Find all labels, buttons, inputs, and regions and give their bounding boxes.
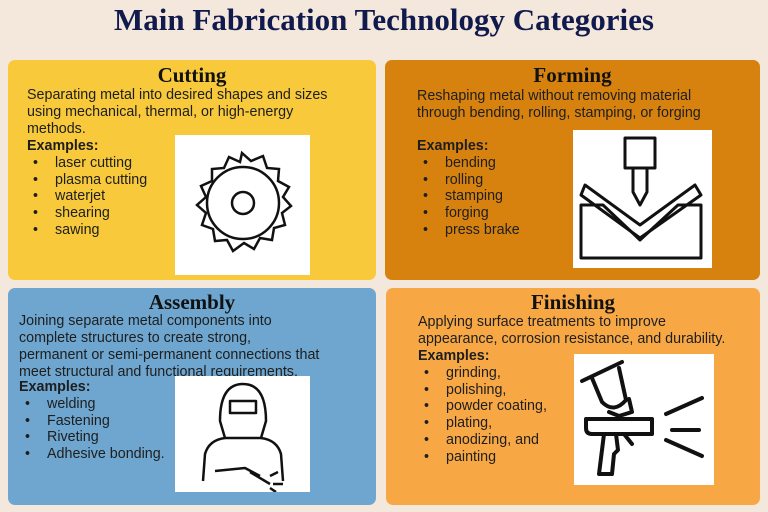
list: assembly examples: Examples:	[19, 379, 91, 395]
panel: finishing	[386, 288, 760, 505]
text: cutting description: methods.	[27, 121, 86, 137]
list: forming examples: stamping	[445, 188, 503, 204]
list: assembly examples	[19, 379, 165, 462]
list: forming examples: Examples:	[417, 138, 489, 154]
list: cutting examples: laser cutting	[55, 155, 132, 171]
text: finishing description	[418, 314, 725, 347]
panel: forming	[385, 60, 760, 280]
list: finishing examples: grinding,	[446, 365, 501, 381]
text: cutting description	[27, 87, 327, 137]
list: finishing examples: powder coating,	[446, 398, 547, 414]
panel: cutting	[8, 60, 376, 280]
list: cutting examples: waterjet	[55, 188, 105, 204]
list: assembly examples: welding	[47, 396, 95, 412]
icon: press brake	[573, 130, 712, 268]
heading: forming: Forming	[533, 63, 612, 87]
list: forming examples: rolling	[445, 172, 483, 188]
list: finishing examples: polishing,	[446, 382, 506, 398]
title: Main Fabrication Technology Categories	[114, 2, 654, 37]
icon: saw blade	[175, 135, 310, 275]
text: assembly description: permanent or semi-permanent connections that	[19, 347, 319, 363]
list: forming examples: press brake	[445, 222, 520, 238]
list: finishing examples: plating,	[446, 415, 492, 431]
list: cutting examples: sawing	[55, 222, 100, 238]
heading: assembly: Assembly	[149, 290, 235, 314]
list: assembly examples: Fastening	[47, 413, 110, 429]
icon: welder	[175, 376, 310, 492]
text: assembly description	[19, 313, 320, 380]
list: cutting examples	[27, 138, 147, 238]
text: forming description: Reshaping metal without removing material	[417, 88, 691, 104]
list: cutting examples: Examples:	[27, 138, 99, 154]
list: assembly examples: Adhesive bonding.	[47, 446, 165, 462]
list: forming examples: forging	[445, 205, 489, 221]
list: finishing examples	[418, 348, 547, 465]
text: assembly description: Joining separate metal components into	[19, 313, 272, 329]
text: cutting description: using mechanical, thermal, or high-energy	[27, 104, 293, 120]
text: cutting description: Separating metal into desired shapes and sizes	[27, 87, 327, 103]
list: forming examples: bending	[445, 155, 496, 171]
text: finishing description: Applying surface treatments to improve	[418, 314, 666, 330]
list: finishing examples: anodizing, and	[446, 432, 539, 448]
text: assembly description: complete structures to create strong,	[19, 330, 251, 346]
list: finishing examples: Examples:	[418, 348, 490, 364]
list: cutting examples: plasma cutting	[55, 172, 147, 188]
heading: finishing: Finishing	[531, 290, 615, 314]
text: forming description: through bending, rolling, stamping, or forging	[417, 105, 701, 121]
text: finishing description: appearance, corrosion resistance, and durability.	[418, 331, 725, 347]
text: assembly description: meet structural and functional requirements.	[19, 364, 298, 380]
icon: spray gun	[574, 354, 714, 485]
list: assembly examples: Riveting	[47, 429, 99, 445]
heading: cutting: Cutting	[158, 63, 226, 87]
panel: assembly	[8, 288, 376, 505]
list: forming examples	[417, 138, 520, 238]
list: finishing examples: painting	[446, 449, 496, 465]
list: cutting examples: shearing	[55, 205, 110, 221]
text: forming description	[417, 88, 701, 121]
